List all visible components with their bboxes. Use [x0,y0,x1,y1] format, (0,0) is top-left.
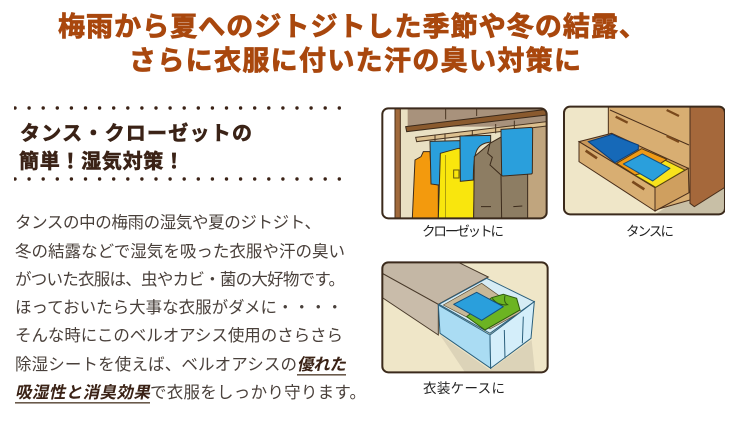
heading: closet humidity measures [15,108,345,179]
emphasis: superior absorbency: 吸湿性と消臭効果 [14,383,153,402]
green clothes [467,294,520,330]
caption: dresser: タンスに [626,224,674,239]
heading: closet humidity measures: タンス・クローゼットの [20,121,252,145]
sleeve [382,273,438,335]
body text: そんな時にこのベルオアシス使用のさらさら [15,326,343,345]
blue shirt [588,134,638,163]
body text: 冬の結露などで湿気を吸った衣服や汗の臭い [15,242,345,261]
brown suit [474,137,528,218]
orange coat [412,152,438,218]
yellow shirt [635,159,685,187]
drawer [578,132,690,171]
yellow coat [438,148,475,218]
title: さらに衣服に付いた汗の臭い対策に [129,46,581,76]
title: 梅雨から夏へのジトジトした季節や冬の結露、 [58,12,646,42]
heading: closet humidity measures: 簡単！湿気対策！ [19,150,184,173]
panel: storage case [382,262,548,372]
blue sheet [430,141,460,185]
body text: 除湿シートを使えば、ベルオアシスの [15,355,297,374]
emphasis: superior absorbency [14,355,349,404]
body text [14,213,366,404]
body text: がついた衣服は、虫やカビ・菌の大好物です。 [15,270,345,289]
blue sheet [623,154,670,181]
caption: storage case: 衣装ケースに [423,381,505,396]
panel: closet [382,108,547,218]
blue sheet [501,127,533,176]
caption: closet: クローゼットに [422,224,504,239]
emphasis: superior absorbency: 優れた [296,355,349,374]
blue sheet [454,292,503,320]
blue sheet [460,135,491,181]
hangers [435,121,514,142]
orange shirt [617,149,667,175]
title [58,12,646,76]
body text: ほっておいたら大事な衣服がダメに・・・・ [15,298,343,317]
body text: で衣服をしっかり守ります。 [150,383,366,402]
body text: タンスの中の梅雨の湿気や夏のジトジト、 [15,213,321,232]
case interior [439,278,534,333]
case front [438,305,491,368]
panel: dresser [564,107,725,214]
